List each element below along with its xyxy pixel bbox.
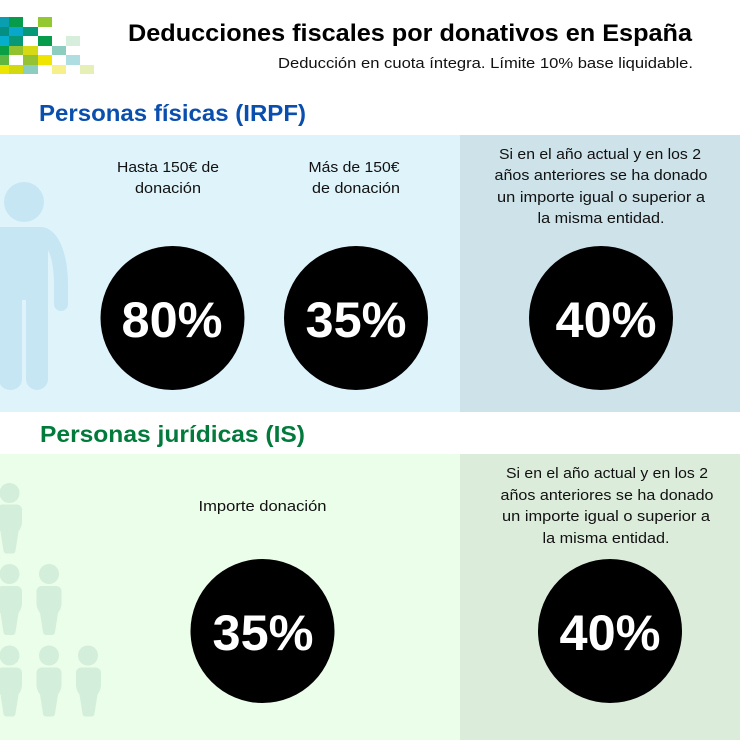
panel: personas físicas: un importe igual o superior a — [497, 190, 706, 206]
panel: jurídicas recurrente — [460, 454, 740, 740]
icon: person — [0, 182, 68, 390]
panel: personas jurídicas: un importe igual o superior a — [502, 509, 711, 525]
title: Deducciones fiscales por donativos en España — [128, 20, 693, 47]
panel: personas jurídicas: años anteriores se ha donado — [500, 488, 714, 504]
heading: Personas jurídicas: Personas jurídicas (IS) — [40, 421, 305, 447]
text: recurrente: Si en el año actual y en los 2 — [499, 147, 701, 163]
badge: 40%: 40% — [556, 292, 656, 348]
panel: personas físicas: donación — [135, 181, 201, 197]
logo: colored mosaic — [0, 17, 94, 74]
badge: 35% — [284, 246, 428, 390]
text: recurrente: Si en el año actual y en los 2 — [506, 466, 708, 482]
badge: 40% — [538, 559, 682, 703]
badge: 80% — [100, 246, 244, 390]
badge: 40%: 40% — [560, 605, 660, 661]
panel: personas jurídicas: la misma entidad. — [542, 531, 670, 547]
panel: personas físicas: la misma entidad. — [538, 211, 664, 227]
badge: 35%: 35% — [306, 292, 406, 348]
text: hasta 150: Hasta 150€ de — [117, 160, 219, 176]
badge: 35%: 35% — [212, 605, 314, 661]
subtitle: Deducción en cuota íntegra. Límite 10% base liquidable. — [278, 55, 693, 72]
text: más de 150: Más de 150€ — [308, 160, 400, 176]
panel: físicas recurrente — [460, 135, 740, 412]
badge: 40% — [529, 246, 673, 390]
badge: 35% — [190, 559, 334, 703]
panel: personas físicas: años anteriores se ha donado — [494, 168, 708, 184]
icons: people group — [0, 483, 101, 716]
text: importe donación: Importe donación — [198, 499, 326, 515]
heading: Personas físicas: Personas físicas (IRPF) — [39, 100, 306, 126]
badge: 80%: 80% — [122, 292, 222, 348]
panel: personas físicas: de donación — [312, 181, 400, 197]
panel: personas físicas — [0, 135, 740, 412]
panel: personas jurídicas — [0, 454, 740, 740]
